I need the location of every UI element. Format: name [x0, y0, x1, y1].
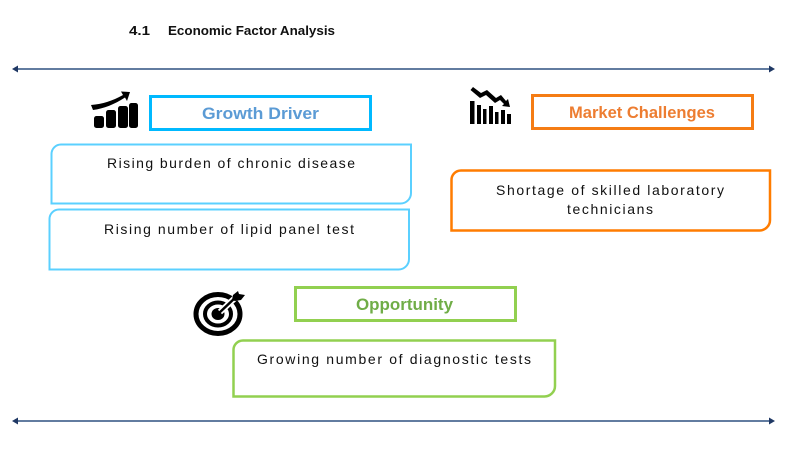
panel: growing number of diagnostic tests — [234, 340, 555, 396]
title: Economic Factor Analysis — [168, 23, 335, 38]
icon: falling bar chart — [470, 87, 511, 124]
title: 4.1 — [129, 23, 150, 38]
icon: target with arrow — [196, 291, 245, 334]
heading: opportunity — [296, 288, 516, 320]
panel: rising burden of chronic disease — [52, 144, 411, 204]
panel: shortage of skilled laboratory technicians — [452, 170, 770, 230]
panel: rising burden of chronic disease: Rising burden of chronic disease — [107, 155, 355, 171]
panel: shortage of skilled laboratory technicians: technicians — [567, 201, 653, 217]
heading: opportunity: Opportunity — [356, 295, 454, 314]
icon: rising bar chart — [91, 92, 138, 128]
heading: growth driver: Growth Driver — [202, 104, 319, 123]
top double arrow — [12, 66, 775, 72]
heading: market challenges — [532, 96, 752, 128]
heading: growth driver — [150, 96, 370, 130]
heading: market challenges: Market Challenges — [569, 103, 715, 122]
panel: rising number of lipid panel test: Rising number of lipid panel test — [104, 221, 354, 237]
panel: shortage of skilled laboratory technicians: Shortage of skilled laboratory — [496, 182, 724, 198]
bottom double arrow — [12, 418, 775, 424]
panel: growing number of diagnostic tests: Growing number of diagnostic tests — [257, 351, 531, 367]
panel: rising number of lipid panel test — [50, 210, 409, 270]
